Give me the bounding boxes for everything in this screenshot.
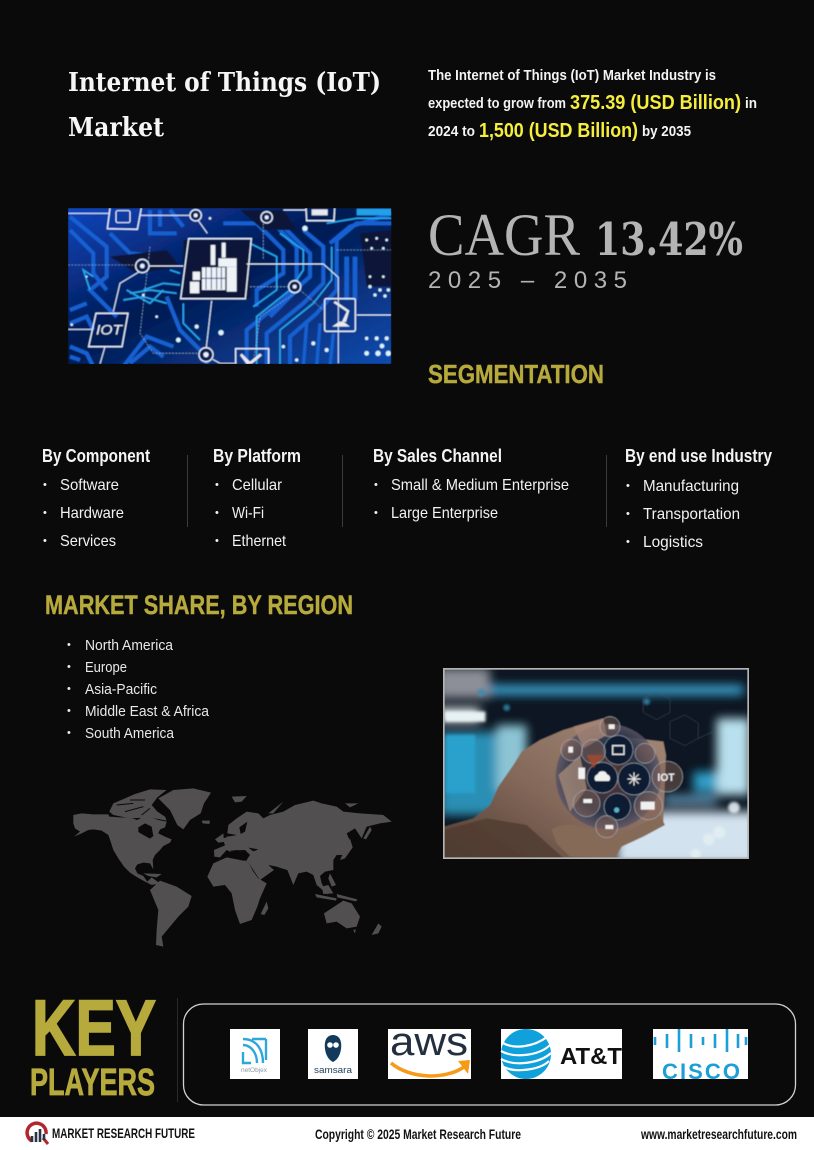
key players heading: KEY (32, 983, 156, 1072)
column: by platform: Wi-Fi (232, 505, 264, 522)
region list: • (67, 727, 71, 739)
column: by platform: • (215, 507, 219, 519)
image: IoT circuit board (68, 208, 393, 367)
market growth summary text: 375.39 (USD Billion) (570, 92, 741, 114)
column: by platform: • (215, 535, 219, 547)
image: IoT circuit board: IOT (96, 321, 124, 337)
region list: Asia-Pacific (85, 681, 157, 698)
region list: • (67, 683, 71, 695)
logo: Cisco (653, 1029, 748, 1084)
column: by component (42, 446, 150, 550)
logo: samsara (308, 1029, 358, 1079)
CAGR block: 13.42% (595, 213, 743, 266)
logo: AT&T: AT&T (560, 1043, 622, 1069)
column: by end use industry: Logistics (643, 534, 703, 551)
heading: market share by region: MARKET SHARE, BY REGION (45, 590, 353, 620)
key players heading: PLAYERS (30, 1062, 155, 1104)
CAGR block: CAGR (428, 202, 580, 268)
market growth summary text: 2024 to (428, 124, 475, 140)
title (68, 68, 381, 143)
region list: Middle East & Africa (85, 703, 210, 720)
column: by component: • (43, 479, 47, 491)
market growth summary text: The Internet of Things (IoT) Market Industry is (428, 68, 716, 84)
title: Market (68, 113, 164, 143)
column: by platform: • (215, 479, 219, 491)
footer: MARKET RESEARCH FUTURE (52, 1125, 195, 1141)
column: by end use industry: • (626, 536, 630, 548)
region list: • (67, 661, 71, 673)
logo: Cisco: CISCO (662, 1059, 740, 1084)
column: by sales channel: By Sales Channel (373, 446, 502, 466)
column: by platform: By Platform (213, 446, 301, 466)
image: hand holding IoT globe (437, 668, 757, 865)
region list: South America (85, 725, 175, 742)
column: by platform (213, 446, 301, 550)
heading: segmentation: SEGMENTATION (428, 359, 604, 389)
column: by sales channel: • (374, 479, 378, 491)
market growth summary text: in (745, 96, 757, 112)
column: by component: By Component (42, 446, 150, 466)
region list: North America (85, 637, 174, 654)
CAGR block (428, 202, 743, 294)
logo: netObjex: netObjex (241, 1067, 268, 1074)
region list: Europe (85, 659, 127, 676)
column: by sales channel: • (374, 507, 378, 519)
column: by end use industry: • (626, 508, 630, 520)
region list: • (67, 705, 71, 717)
key players heading (30, 983, 156, 1104)
market growth summary text: 1,500 (USD Billion) (479, 120, 638, 142)
column: by end use industry (625, 446, 772, 551)
footer logo icon (27, 1123, 48, 1144)
column: by component: Software (60, 477, 119, 494)
column: by sales channel (373, 446, 569, 522)
key players panel (184, 1004, 796, 1105)
column: by component: • (43, 507, 47, 519)
column: by end use industry: Manufacturing (643, 478, 739, 495)
column: by sales channel: Large Enterprise (391, 505, 498, 522)
column: by end use industry: • (626, 480, 630, 492)
column: by end use industry: By end use Industry (625, 446, 772, 466)
column: by end use industry: Transportation (643, 506, 740, 523)
logo: aws (388, 1020, 471, 1079)
column: by platform: Cellular (232, 477, 283, 494)
market growth summary text (428, 68, 757, 142)
region list (67, 637, 210, 742)
market growth summary text: by 2035 (642, 124, 691, 140)
logo: aws: aws (390, 1020, 468, 1064)
column: by component: • (43, 535, 47, 547)
logo: netObjex (230, 1029, 280, 1079)
logo: samsara: samsara (314, 1065, 352, 1075)
logo: AT&T (501, 1029, 622, 1079)
title: Internet of Things (IoT) (68, 68, 381, 98)
footer (0, 1117, 814, 1150)
CAGR block: 2025 – 2035 (428, 267, 627, 294)
column: by component: Services (60, 533, 116, 550)
footer: Copyright © 2025 Market Research Future (315, 1126, 521, 1142)
region list: • (67, 639, 71, 651)
image: hand holding IoT globe: IOT (657, 772, 675, 784)
column: by platform: Ethernet (232, 533, 286, 550)
column: by sales channel: Small & Medium Enterprise (391, 477, 569, 494)
column: by component: Hardware (60, 505, 124, 522)
world map (73, 788, 392, 947)
market growth summary text: expected to grow from (428, 96, 566, 112)
